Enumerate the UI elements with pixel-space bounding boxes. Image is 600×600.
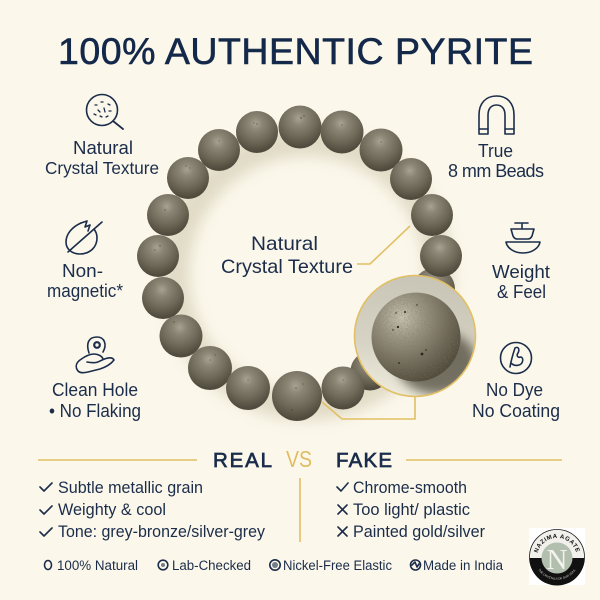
feature: true 8 mm beads [448, 96, 544, 181]
badge: 100% natural: 100% Natural [57, 558, 138, 573]
feature: weight and feel [492, 223, 550, 302]
feature: clean hole: • No Flaking [49, 401, 141, 421]
feature: weight and feel: & Feel [497, 282, 546, 302]
feature: natural crystal texture: Crystal Texture [45, 158, 159, 178]
list: fake: Painted gold/silver [353, 523, 485, 541]
feature: no dye no coating: No Dye [486, 380, 543, 400]
feature: no dye no coating [472, 342, 560, 421]
feature: natural crystal texture [45, 94, 159, 178]
logo: nazima agate [529, 528, 585, 586]
lens [354, 275, 476, 397]
title: 100% AUTHENTIC PYRITE [58, 30, 533, 72]
icon: cup and bowl [506, 223, 540, 253]
list: fake: Chrome-smooth [353, 479, 467, 497]
heading: real vs fake [38, 446, 562, 472]
feature: non-magnetic: magnetic* [47, 281, 123, 301]
list: real: Tone: grey-bronze/silver-grey [58, 523, 266, 541]
bead speckles [154, 115, 382, 411]
feature: no dye no coating: No Coating [472, 401, 560, 421]
list: real: Subtle metallic grain [58, 479, 203, 497]
badge: lab-checked: Lab-Checked [172, 558, 251, 573]
logo: nazima agate: N [547, 544, 568, 576]
list: real [40, 479, 266, 541]
center label: Crystal Texture [221, 256, 353, 278]
feature: clean hole: Clean Hole [52, 380, 138, 400]
feature: clean hole [49, 337, 141, 421]
badge: nickel-free elastic: Nickel-Free Elastic [283, 558, 392, 573]
icon: no dye circle [500, 342, 532, 374]
list: real: Weighty & cool [58, 501, 166, 519]
logo: nazima agate: NAZIMA AGATE [534, 534, 580, 553]
icon: hand with bead [76, 337, 114, 373]
heading: real vs fake: FAKE [336, 449, 392, 472]
list: fake: Too light/ plastic [353, 501, 470, 519]
bracelet [137, 106, 462, 421]
center label [221, 233, 353, 278]
callout: zoomed bead [322, 226, 476, 419]
beads [137, 106, 462, 421]
lens ring [354, 276, 476, 396]
list: fake [337, 479, 485, 541]
center label: Natural [251, 233, 318, 255]
bracelet shadow [175, 142, 439, 406]
feature: non-magnetic [47, 221, 123, 301]
feature: true 8 mm beads: True [478, 141, 513, 161]
feature: non-magnetic: Non- [62, 261, 103, 281]
badge: made in india: Made in India [423, 558, 503, 573]
feature: natural crystal texture: Natural [73, 138, 133, 158]
icon: no magnet [66, 221, 102, 254]
large sphere [372, 292, 460, 382]
feature: true 8 mm beads: 8 mm Beads [448, 161, 544, 181]
feature: weight and feel: Weight [492, 262, 550, 282]
footer badges [44, 558, 503, 573]
column divider [299, 478, 301, 542]
heading: real vs fake: REAL [213, 449, 272, 472]
icon: magnifier [86, 94, 123, 129]
callout lines [322, 396, 415, 419]
heading: real vs fake: VS [286, 446, 312, 472]
icon: magnet arch [479, 96, 514, 134]
logo: nazima agate: THE CRYSTALS OF OUR SOUL [538, 568, 576, 580]
lens shadow [396, 330, 476, 394]
